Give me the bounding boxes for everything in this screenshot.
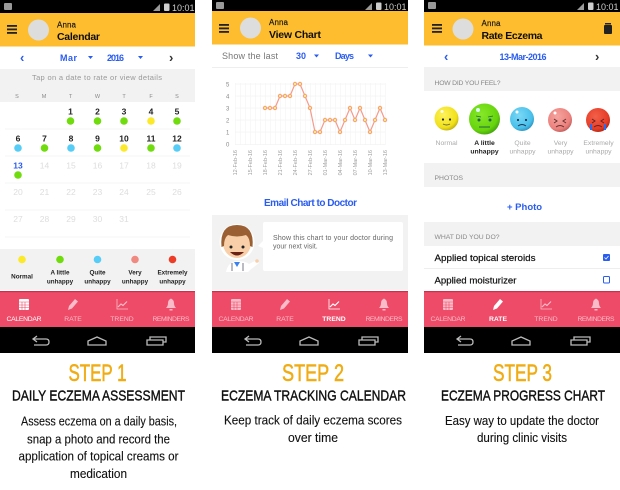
speech bubble: your next visit. [273, 244, 318, 250]
heading: step 1: STEP 1 [68, 360, 126, 387]
calendar grid: 19 [172, 160, 182, 170]
phone screen: step 2 chart [212, 0, 408, 353]
feeling faces: unhappy [547, 148, 574, 156]
subtitle: daily eczema assessment: DAILY ECZEMA ASSESSMENT [12, 388, 185, 404]
phone screen: step 3 rate eczema [424, 0, 620, 353]
feeling faces: unhappy [470, 148, 499, 156]
line chart: eczema score over time: 13-Mar-16 [383, 150, 389, 175]
severity legend: unhappy [84, 278, 111, 286]
description: step 3 [445, 413, 600, 445]
tab bar: trend active: TREND [322, 316, 346, 323]
line chart: eczema score over time: 4 [226, 94, 230, 100]
description: step 1: Assess eczema on a daily basis, [21, 414, 177, 428]
face: a little unhappy [469, 104, 500, 134]
line chart: eczema score over time [226, 82, 389, 175]
tab bar: calendar active [0, 291, 195, 327]
tab bar: calendar active: TREND [110, 316, 134, 323]
line chart: eczema score over time: 2 [226, 118, 230, 124]
app header: Anna View Chart [212, 11, 408, 44]
android navigation keys [424, 327, 620, 353]
calendar grid: 29 [66, 214, 76, 224]
section heading: what did you do [424, 222, 620, 246]
range selector: Show the last [222, 51, 278, 61]
line chart: eczema score over time: 3 [226, 106, 230, 112]
add photo link: + Photo [507, 202, 542, 213]
hint and weekday strip: S [175, 94, 179, 100]
heading: step 3: STEP 3 [493, 360, 552, 387]
line chart: eczema score over time: 10-Mar-16 [368, 150, 374, 175]
hint and weekday strip: Tap on a date to rate or view details [32, 73, 162, 82]
date selector: ‹ [444, 49, 448, 64]
status bar [0, 0, 195, 13]
tab bar: rate active: REMINDERS [578, 316, 615, 323]
feeling faces: Extremely [583, 140, 614, 147]
calendar grid: 1 [68, 106, 73, 116]
calendar grid: 2 [95, 106, 100, 116]
description: step 2: over time [288, 430, 338, 445]
calendar grid: 25 [146, 187, 156, 197]
month selector [20, 50, 173, 65]
calendar grid: 11 [146, 134, 156, 144]
tab bar: trend active: CALENDAR [218, 316, 254, 323]
hint and weekday strip: S [15, 94, 19, 100]
icon: cartoon doctor [220, 224, 259, 272]
severity legend: Normal [11, 274, 33, 280]
date selector: 13-Mar-2016 [500, 52, 546, 62]
doctor advice panel [212, 215, 408, 290]
severity legend: Extremely [157, 270, 188, 276]
feeling faces: A little [474, 140, 495, 147]
calendar grid: 27 [13, 214, 23, 224]
hint and weekday strip: F [149, 94, 153, 100]
calendar grid: 12 [172, 134, 182, 144]
line chart: eczema score over time: 1 [226, 130, 230, 136]
checkbox: applied moisturizer [434, 276, 610, 286]
status bar [424, 0, 620, 12]
tab bar: rate active: RATE [489, 316, 507, 323]
calendar grid: 24 [119, 187, 129, 197]
checkbox: applied moisturizer: Applied moisturizer [434, 276, 516, 286]
calendar grid: 18 [146, 160, 156, 170]
line chart: eczema score over time: 18-Feb-16 [263, 150, 269, 175]
tab bar: trend active [212, 291, 408, 327]
calendar grid: 15 [66, 160, 76, 170]
feeling faces: Quite [514, 140, 531, 147]
description: step 1: application of topical creams or [18, 448, 179, 464]
calendar grid: 23 [93, 187, 102, 197]
section heading: how did you feel: HOW DID YOU FEEL? [434, 80, 501, 87]
line chart: eczema score over time: 24-Feb-16 [293, 150, 299, 175]
app header: Anna Calendar: Calendar [57, 31, 100, 43]
severity legend [0, 249, 195, 290]
severity legend: A little [50, 270, 70, 276]
app header: Anna View Chart: Anna [269, 18, 289, 27]
feeling faces: Very [554, 140, 568, 147]
calendar grid: 30 [93, 214, 102, 224]
heading: step 2: STEP 2 [282, 360, 344, 387]
tab bar: calendar active: REMINDERS [152, 316, 190, 323]
calendar grid: 26 [172, 187, 182, 197]
icon: trash [604, 23, 612, 34]
section heading: photos: PHOTOS [434, 175, 464, 182]
calendar grid: 3 [122, 106, 127, 116]
calendar grid: 13 [13, 160, 23, 170]
description: step 1 [18, 414, 179, 481]
month selector: ‹ [20, 50, 24, 65]
calendar grid: 17 [119, 160, 129, 170]
hint and weekday strip: M [42, 94, 47, 100]
description: step 2: Keep track of daily eczema scores [224, 412, 402, 428]
checkbox: applied topical steroids: Applied topical steroids [434, 253, 536, 264]
severity legend: unhappy [159, 278, 186, 286]
line chart: eczema score over time: 5 [226, 82, 230, 88]
tab bar: calendar active: RATE [64, 316, 82, 323]
severity legend: Very [128, 270, 142, 276]
line chart: eczema score over time: 12-Feb-16 [233, 150, 239, 175]
severity legend: unhappy [122, 278, 149, 286]
description: step 1: medication [70, 466, 127, 481]
caption: step 3 [441, 360, 605, 445]
hint and weekday strip: W [95, 94, 101, 100]
speech bubble: Show this chart to your doctor during [273, 235, 393, 242]
phone screen: step 1 calendar [0, 0, 195, 353]
calendar grid [5, 106, 190, 237]
date selector: › [595, 49, 599, 64]
hint and weekday strip [0, 69, 195, 102]
calendar grid: 22 [66, 187, 76, 197]
line chart: eczema score over time: 01-Mar-16 [323, 150, 329, 175]
date selector [444, 49, 599, 64]
description: step 3: Easy way to update the doctor [445, 413, 600, 428]
calendar grid: 31 [119, 214, 129, 224]
month selector: Mar [60, 53, 77, 63]
android navigation keys [0, 327, 195, 353]
line chart: eczema score over time: 15-Feb-16 [248, 150, 254, 175]
calendar grid: 6 [16, 134, 21, 144]
calendar grid: 10 [119, 134, 129, 144]
description: step 2 [224, 412, 402, 445]
calendar grid: 28 [40, 214, 49, 224]
status bar [212, 0, 408, 12]
calendar grid: 5 [175, 106, 180, 116]
calendar grid: 9 [95, 134, 100, 144]
tab bar: rate active: TREND [534, 316, 558, 323]
subtitle: eczema tracking calendar: ECZEMA TRACKING CALENDAR [221, 388, 406, 404]
hint and weekday strip: T [122, 94, 126, 100]
caption: step 1 [12, 360, 185, 481]
calendar grid: 14 [40, 160, 49, 170]
speech bubble [258, 222, 403, 271]
email chart link: Email Chart to Doctor [264, 198, 357, 209]
hint and weekday strip: T [69, 94, 73, 100]
tab bar: rate active: CALENDAR [430, 316, 466, 323]
calendar grid: 4 [149, 106, 154, 116]
tab bar: rate active [424, 291, 620, 327]
calendar grid: 21 [40, 187, 49, 197]
section heading: what did you do: WHAT DID YOU DO? [434, 234, 500, 241]
checkbox: applied topical steroids [424, 253, 620, 269]
description: step 3: during clinic visits [477, 430, 567, 445]
calendar grid: 16 [93, 160, 102, 170]
feeling faces: unhappy [509, 148, 536, 156]
severity legend: Quite [89, 270, 106, 276]
tab bar: trend active: RATE [276, 316, 294, 323]
line chart: eczema score over time: 0 [226, 142, 230, 148]
app header: Anna Rate Eczema: Rate Eczema [482, 30, 543, 42]
description: step 1: snap a photo and record the [27, 432, 170, 446]
app header: Anna Rate Eczema: Anna [482, 19, 501, 28]
range selector: 30 [296, 51, 306, 61]
face: extremely unhappy [586, 108, 610, 132]
month selector: 2016 [107, 53, 124, 63]
calendar grid: 20 [13, 187, 23, 197]
feeling faces [434, 104, 614, 156]
tab bar: calendar active: CALENDAR [6, 316, 42, 323]
caption: step 2 [221, 360, 406, 445]
range selector [212, 51, 408, 68]
line chart: eczema score over time: 27-Feb-16 [308, 150, 314, 175]
section heading: how did you feel [424, 67, 620, 91]
range selector: Days [335, 51, 354, 61]
line chart: eczema score over time: 21-Feb-16 [278, 150, 284, 175]
line chart: eczema score over time: 04-Mar-16 [338, 150, 344, 175]
android navigation keys [212, 327, 408, 353]
app header: Anna Calendar [0, 13, 195, 46]
feeling faces: unhappy [585, 148, 612, 156]
app header: Anna Rate Eczema [424, 12, 620, 46]
severity legend: unhappy [47, 278, 74, 286]
face: very unhappy [548, 108, 572, 132]
section heading: photos [424, 163, 620, 187]
face: normal [434, 106, 458, 130]
app header: Anna Calendar: Anna [57, 20, 77, 30]
calendar grid: 7 [42, 134, 47, 144]
feeling faces: Normal [436, 140, 458, 147]
line chart: eczema score over time: 07-Mar-16 [353, 150, 359, 175]
calendar grid: 8 [69, 134, 74, 144]
tab bar: trend active: REMINDERS [366, 316, 403, 323]
app header: Anna View Chart: View Chart [269, 29, 322, 41]
month selector: › [169, 50, 173, 65]
face: quite unhappy [510, 107, 534, 131]
